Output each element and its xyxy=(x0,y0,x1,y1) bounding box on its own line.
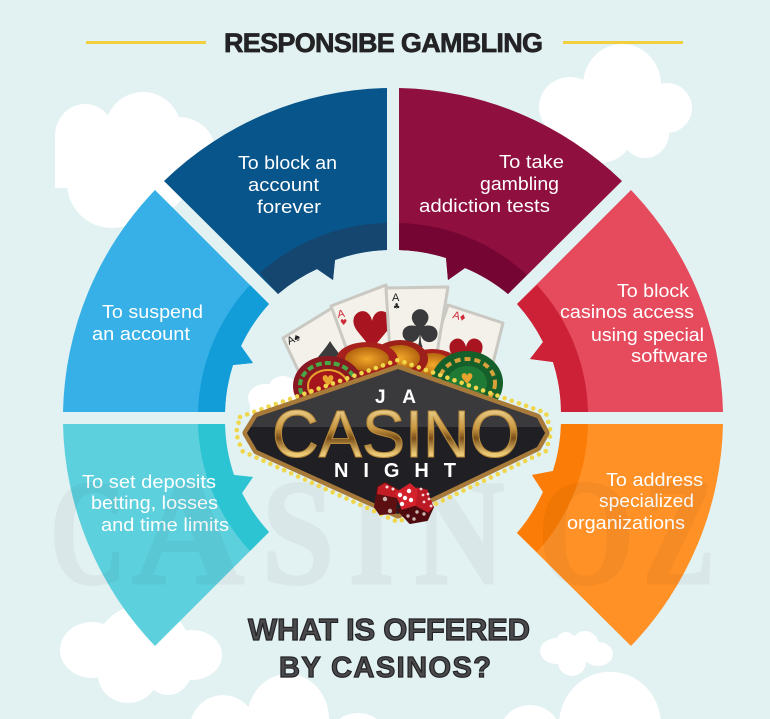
card: ace of diamonds: A♦ xyxy=(451,309,467,324)
sign frame xyxy=(247,369,545,514)
text: addiction tests xyxy=(419,152,564,216)
logo text: CASINO: CASINO xyxy=(272,397,520,472)
text: block casinos: casinos access xyxy=(560,302,694,322)
card: ace of hearts: A xyxy=(336,308,346,321)
card: ace of spades: ♠ xyxy=(308,332,352,388)
text: suspend account xyxy=(92,302,203,344)
text: block account: forever xyxy=(257,197,321,217)
sign upper face xyxy=(247,369,545,514)
sign lights xyxy=(236,360,551,522)
logo: casino night xyxy=(236,285,551,523)
text: organizations: specialized xyxy=(599,491,694,511)
cloud: bottom left xyxy=(60,605,222,703)
panel: block casinos access xyxy=(517,190,723,412)
panel: block account forever xyxy=(164,88,387,294)
panel: suspend account xyxy=(63,190,269,412)
text: block casinos: software xyxy=(631,346,708,366)
bottom heading: BY CASINOS? xyxy=(279,652,491,684)
bottom heading xyxy=(248,612,530,684)
text: block account: To block an xyxy=(238,153,337,173)
sign lower shade xyxy=(247,427,545,514)
inner band: crimson xyxy=(399,223,527,294)
logo text: NIGHT: NIGHT xyxy=(334,460,456,482)
text: block casinos: using special xyxy=(591,325,704,345)
chip: green: ♥ xyxy=(460,370,474,388)
panel: set limits xyxy=(63,424,269,646)
chip: red xyxy=(293,356,363,416)
text: set limits: and time limits xyxy=(101,515,229,535)
bottom heading: WHAT IS OFFERED xyxy=(248,612,530,647)
watermark xyxy=(50,450,715,616)
title rule left xyxy=(86,41,206,44)
watermark: I xyxy=(349,450,394,616)
logo text: JA: JA xyxy=(375,387,416,408)
card: ace of hearts: ♥ xyxy=(349,302,395,362)
inner band: red xyxy=(517,285,588,412)
text: set limits: betting, losses xyxy=(91,493,218,513)
watermark: O xyxy=(538,450,634,616)
card: ace of hearts: ♥ xyxy=(340,318,347,327)
watermark: A xyxy=(132,450,244,616)
cloud: bottom right xyxy=(504,672,661,719)
panel: addiction tests xyxy=(399,88,622,294)
cloud: top right xyxy=(539,44,692,163)
text: organizations: To address xyxy=(606,470,703,490)
dice xyxy=(375,483,433,523)
text: suspend account: an account xyxy=(92,324,190,344)
text: organizations: organizations xyxy=(567,513,685,533)
text: organizations xyxy=(567,470,703,533)
watermark: N xyxy=(415,450,504,616)
card: ace of diamonds: ♥ xyxy=(445,329,487,383)
watermark: C xyxy=(50,450,126,616)
card: ace of clubs xyxy=(386,287,448,360)
cloud: behind logo xyxy=(248,376,300,415)
text: block casinos xyxy=(560,281,708,366)
die: right xyxy=(396,484,433,523)
card: ace of clubs: A xyxy=(392,292,400,304)
title rule right xyxy=(563,41,683,44)
chip: green xyxy=(431,351,503,415)
card: ace of clubs: ♣ xyxy=(397,300,443,360)
text: block account: account xyxy=(248,175,319,195)
text: set limits xyxy=(82,472,229,535)
chip: orange stack xyxy=(336,340,460,383)
title: RESPONSIBE GAMBLING xyxy=(224,28,543,58)
watermark: S xyxy=(262,450,334,616)
text: addiction tests: addiction tests xyxy=(419,196,550,216)
watermark: Z xyxy=(643,450,715,616)
card: ace of hearts xyxy=(331,285,407,362)
inner band: light blue xyxy=(198,285,269,412)
text: suspend account: To suspend xyxy=(102,302,203,322)
chip: red: ♥ xyxy=(321,372,335,390)
inner band: teal xyxy=(198,424,269,551)
text: set limits: To set deposits xyxy=(82,472,216,492)
die: left xyxy=(375,483,398,514)
panel: specialized organizations xyxy=(517,424,723,646)
cloud: small right xyxy=(540,631,613,676)
cloud: top left xyxy=(55,92,215,228)
card: ace of spades xyxy=(283,308,360,388)
inner band: dark blue xyxy=(260,223,387,294)
card: ace of spades: A♠ xyxy=(285,331,302,348)
card: ace of diamonds xyxy=(433,305,503,383)
card: ace of clubs: ♣ xyxy=(393,302,400,311)
cloud: bottom centre xyxy=(191,674,377,719)
playing cards xyxy=(283,285,503,388)
text: block casinos: To block xyxy=(617,281,690,301)
inner band: orange xyxy=(517,424,588,552)
casino chips xyxy=(293,340,503,416)
text: addiction tests: To take xyxy=(499,152,564,172)
text: block account xyxy=(238,153,337,217)
text: addiction tests: gambling xyxy=(480,174,559,194)
